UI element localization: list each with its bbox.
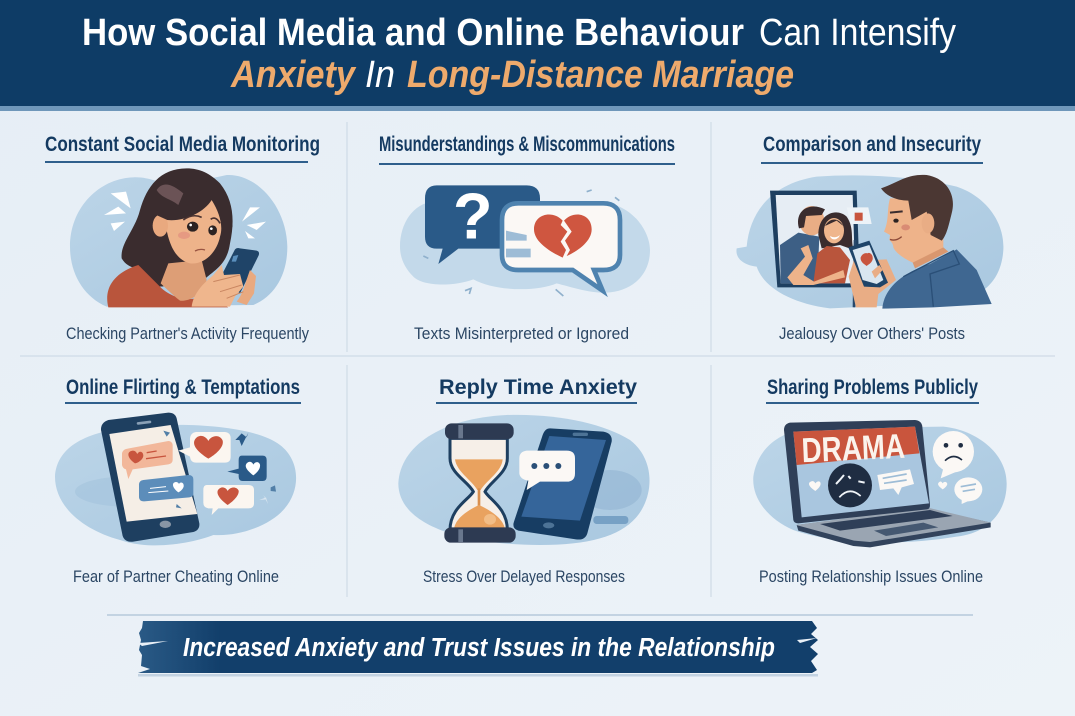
caption: misunderstandings: Texts Misinterpreted or Ignored (414, 324, 629, 343)
title: Can Intensify (759, 12, 956, 54)
title: In (365, 54, 395, 96)
caption: reply time: Stress Over Delayed Responses (423, 567, 625, 586)
heading: comparison: Comparison and Insecurity (763, 133, 981, 156)
illustration: speech bubbles with broken heart: ? (453, 179, 493, 252)
title: Anxiety (230, 54, 357, 96)
illustration: laptop with drama post (753, 420, 1007, 547)
heading: flirting: Online Flirting & Temptations (66, 376, 300, 399)
heading: misunderstandings: Misunderstandings & Miscommunications (379, 133, 675, 156)
panel: misunderstandings (379, 133, 675, 343)
caption: monitoring: Checking Partner's Activity Frequently (66, 324, 309, 343)
illustration: speech bubbles with broken heart (400, 179, 650, 296)
caption: sharing: Posting Relationship Issues Online (759, 567, 983, 586)
illustration: laptop with drama post: DRAMA (801, 428, 906, 470)
caption: comparison: Jealousy Over Others' Posts (779, 324, 965, 343)
title: Long-Distance Marriage (407, 54, 794, 96)
illustration: woman checking phone (70, 168, 287, 307)
panel: reply time anxiety (398, 376, 650, 586)
heading: sharing: Sharing Problems Publicly (767, 376, 978, 399)
illustration: man viewing couple photo (736, 175, 1003, 309)
heading: reply time: Reply Time Anxiety (439, 376, 637, 399)
title: How Social Media and Online Behaviour (82, 12, 744, 54)
heading: monitoring: Constant Social Media Monitoring (45, 133, 320, 156)
panel: constant social media monitoring (45, 133, 320, 343)
man's hand behind phone (849, 259, 896, 307)
title (82, 12, 956, 96)
illustration: hourglass and phone (398, 415, 650, 545)
panel: online flirting (55, 376, 301, 586)
panel: comparison and insecurity (736, 133, 1003, 343)
caption: flirting: Fear of Partner Cheating Online (73, 567, 279, 586)
header band (0, 0, 1075, 111)
panel: sharing problems publicly (753, 376, 1007, 586)
man's torso (882, 249, 992, 309)
conclusion banner (138, 621, 818, 676)
man's head (884, 198, 943, 263)
banner text: Increased Anxiety and Trust Issues in the Relationship (183, 634, 775, 662)
illustration: phone with heart messages (55, 413, 296, 545)
